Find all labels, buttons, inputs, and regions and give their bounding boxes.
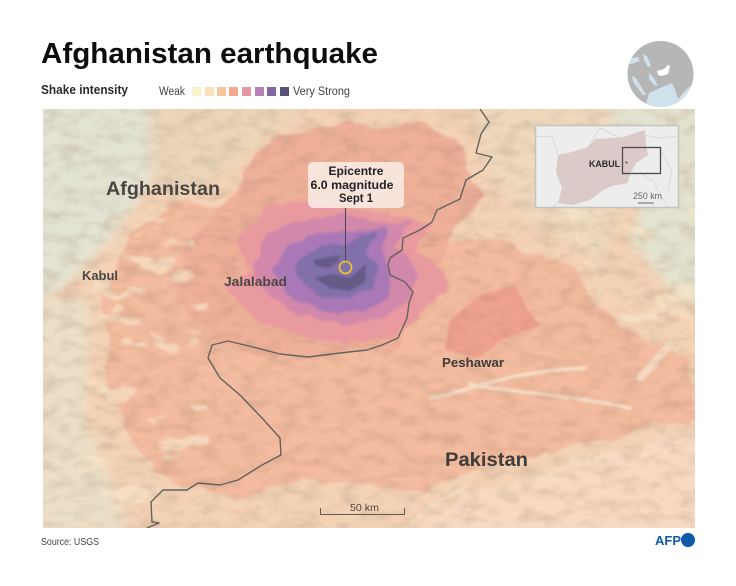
callout: epicentre: Sept 1 (339, 193, 374, 205)
label: Kabul: Kabul (82, 269, 118, 283)
legend label: weak: Weak (159, 86, 185, 98)
contour: pink (225, 200, 448, 344)
inset map (536, 126, 678, 208)
callout: epicentre (308, 162, 404, 208)
inset: extent box (622, 148, 660, 174)
intensity zones (30, 100, 710, 530)
contour: mauve (252, 215, 416, 324)
inset: Kabul dot (626, 162, 628, 164)
logo: AFP: AFP (655, 534, 681, 548)
map base (43, 109, 695, 528)
legend label: very strong: Very Strong (293, 86, 350, 98)
icon: locator globe (628, 41, 694, 107)
map scale: 50 km (350, 502, 379, 514)
contour: violet (272, 226, 392, 313)
callout: epicentre: 6.0 magnitude (310, 180, 394, 192)
intensity contours (225, 200, 448, 344)
label: Peshawar: Peshawar (442, 356, 504, 370)
zone: Peshawar patch (445, 285, 540, 358)
legend: shake intensity (41, 83, 350, 98)
pale plain patches (84, 206, 695, 522)
zone: southern pale plain (416, 430, 695, 528)
panel: shake map (30, 100, 710, 535)
inset: Afghanistan (556, 130, 648, 205)
zone: strong shaking (175, 122, 485, 360)
country border (147, 109, 492, 528)
terrain texture (43, 109, 695, 528)
inset: neighbouring borders (536, 128, 677, 207)
source: Source: USGS (41, 536, 99, 548)
title: Afghanistan earthquake (41, 38, 378, 70)
map scale (320, 502, 404, 514)
zone: moderate shaking (100, 205, 700, 500)
icon: epicentre marker (340, 262, 352, 274)
contour: dark core (313, 255, 366, 291)
contour: purple (295, 230, 378, 298)
inset: Kabul label: KABUL (589, 159, 620, 170)
callout leader line (344, 208, 346, 261)
pale ridges (410, 345, 670, 525)
label: Pakistan: Pakistan (445, 450, 528, 471)
inset: scale: 250 km (633, 191, 662, 202)
label: Jalalabad: Jalalabad (224, 275, 287, 289)
callout: epicentre: Epicentre (328, 166, 384, 178)
label: Afghanistan: Afghanistan (106, 179, 220, 200)
legend heading: Shake intensity (41, 83, 128, 97)
legend swatches (192, 87, 289, 96)
logo: AFP (655, 533, 695, 548)
